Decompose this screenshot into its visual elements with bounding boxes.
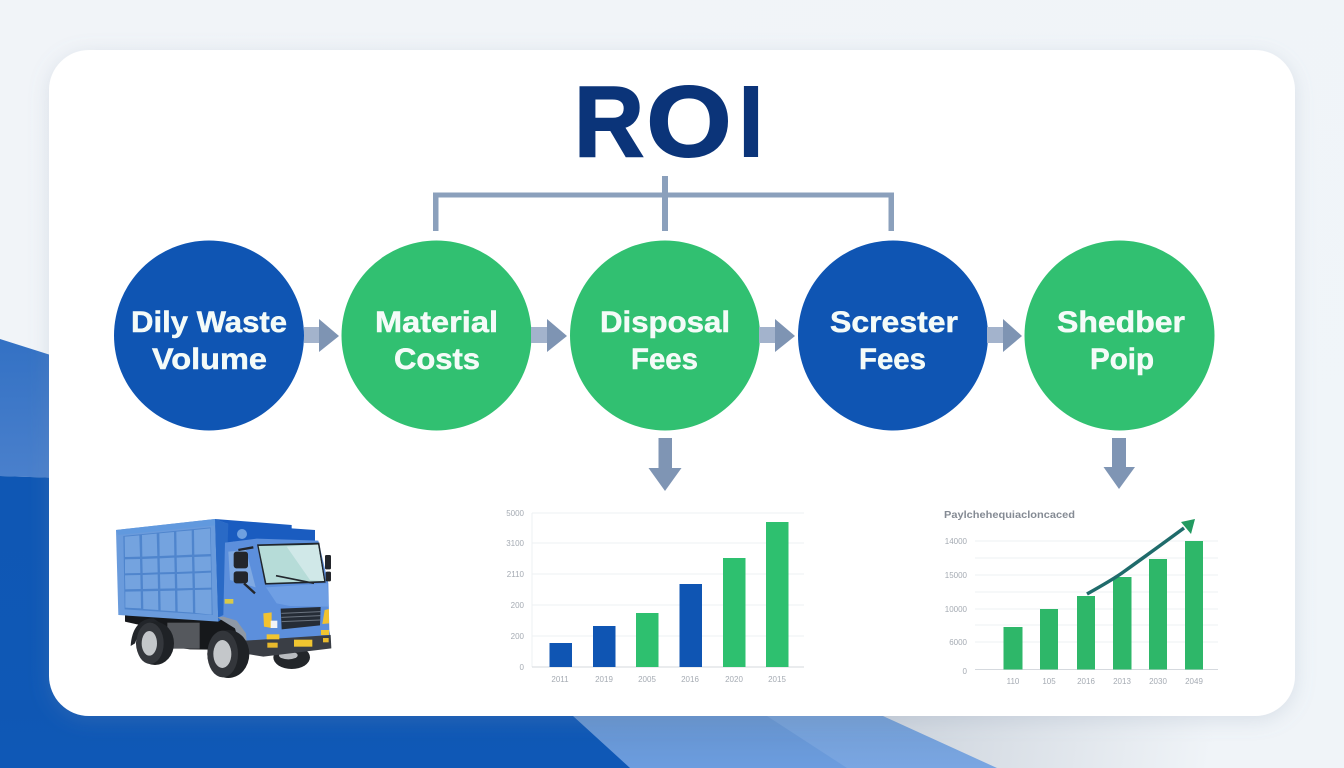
arrow: down to bar chart [648, 438, 682, 491]
step: Material Costs: Material [375, 306, 498, 339]
x axis labels: 2013 [1113, 677, 1131, 686]
y axis labels: 15000 [945, 571, 968, 580]
x axis labels: 2016 [1077, 677, 1095, 686]
arrow: down to trend chart [1104, 438, 1135, 489]
y axis labels: 2110 [507, 570, 525, 579]
step: Daily Waste Volume: Dily Waste [131, 306, 287, 339]
step: Disposal Fees: Fees [631, 343, 698, 376]
y axis labels: 0 [520, 663, 525, 672]
step: Material Costs [342, 240, 532, 430]
bars [1004, 541, 1203, 670]
chart gridlines [975, 541, 1218, 670]
x axis labels: 110 [1007, 677, 1020, 686]
step: Shedber Poip: Poip [1090, 343, 1154, 376]
icon: blue truck [116, 519, 331, 678]
title: I [739, 66, 763, 178]
step: Screster Fees: Screster [830, 306, 958, 339]
step: Screster Fees: Fees [859, 343, 926, 376]
arrow: step 2 to 3 [531, 319, 567, 352]
x axis labels: 2030 [1149, 677, 1167, 686]
arrow: step 3 to 4 [759, 319, 795, 352]
bars [550, 522, 788, 667]
y axis labels: 14000 [945, 537, 968, 546]
x axis labels [1007, 677, 1203, 686]
step: Material Costs: Costs [394, 343, 480, 376]
y axis labels: 5000 [506, 509, 525, 518]
y axis labels: 200 [511, 632, 525, 641]
step: Daily Waste Volume: Volume [152, 343, 267, 376]
chart gridlines [532, 513, 804, 667]
step: Disposal Fees [570, 240, 760, 430]
y axis labels: 0 [963, 667, 968, 676]
title: O [646, 66, 732, 178]
bar chart: fees [506, 509, 804, 684]
y axis labels [945, 537, 968, 676]
x axis labels: 2016 [681, 675, 699, 684]
trend arrow [1087, 519, 1195, 594]
x axis labels: 105 [1042, 677, 1056, 686]
title [574, 66, 763, 178]
trend chart: rising bars [944, 510, 1218, 686]
x axis labels: 2049 [1185, 677, 1203, 686]
step: Disposal Fees: Disposal [600, 306, 730, 339]
y axis labels [506, 509, 525, 672]
arrow: step 4 to 5 [987, 319, 1022, 352]
chart title: Paylchehequiacloncaced [944, 510, 1075, 521]
step: Shedber Poip: Shedber [1057, 306, 1185, 339]
step: Screster Fees [798, 240, 988, 430]
step: Shedber Poip [1024, 240, 1214, 430]
x axis labels: 2005 [638, 675, 656, 684]
x axis labels: 2019 [595, 675, 613, 684]
y axis labels: 200 [511, 601, 525, 610]
y axis labels: 3100 [506, 539, 525, 548]
step: Daily Waste Volume [114, 240, 304, 430]
title: R [574, 66, 644, 178]
bracket connector [433, 176, 894, 231]
x axis labels: 2015 [768, 675, 786, 684]
x axis labels [551, 675, 786, 684]
x axis labels: 2011 [551, 675, 569, 684]
y axis labels: 10000 [945, 605, 968, 614]
y axis labels: 6000 [949, 638, 968, 647]
arrow: step 1 to 2 [304, 319, 339, 352]
x axis labels: 2020 [725, 675, 743, 684]
